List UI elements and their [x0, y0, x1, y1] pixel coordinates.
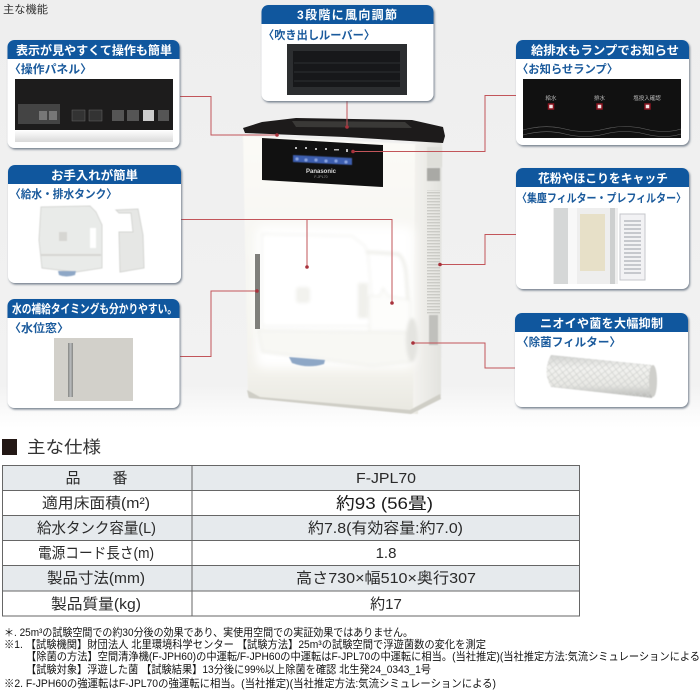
- panel: tanks: [8, 165, 181, 283]
- heading: ニオイや菌を大幅抑制: [540, 316, 663, 330]
- photo: louver: [287, 44, 407, 95]
- row: floor area: 適用床面積(m²): [42, 495, 150, 512]
- row: cord length: [38, 545, 396, 562]
- inner glow: [256, 226, 414, 368]
- footnotes: [4, 625, 700, 690]
- row: weight: 製品質量(kg): [51, 595, 141, 613]
- brand: Panasonic: [306, 169, 337, 175]
- heading: main specifications: 主な仕様: [27, 438, 101, 457]
- row: dimensions: 高さ730×幅510×奥行307: [296, 570, 476, 587]
- heading: 給排水もランプでお知らせ: [531, 42, 679, 58]
- row: floor area: [42, 494, 433, 513]
- specification table: [2, 465, 580, 616]
- row: weight: [51, 595, 402, 613]
- connector lines: [180, 96, 516, 368]
- heading: 花粉やほこりをキャッチ: [538, 170, 668, 186]
- photo: lamps: 塩投入確認: [633, 94, 661, 102]
- panel: operation panel: [8, 40, 180, 148]
- row: floor area: 約93 (56畳): [336, 494, 433, 513]
- heading: 水の補給タイミングも分かりやすい。: [12, 301, 177, 316]
- row: dimensions: 製品寸法(mm): [47, 570, 145, 587]
- product: air purifier humidifier: F-JPL70: [314, 175, 328, 179]
- heading: 表示が見やすくて操作も簡単: [16, 42, 172, 58]
- panel: water level window: [8, 299, 180, 408]
- photo: lamps: 排水: [594, 94, 605, 102]
- row: cord length: 電源コード長さ(m): [38, 545, 154, 562]
- photo: tanks: [39, 206, 144, 276]
- panel: notification lamps: [516, 40, 689, 145]
- subheading: 〈吹き出しルーバー〉: [263, 28, 375, 42]
- row: dimensions: [47, 570, 476, 587]
- photo: window: [54, 338, 133, 401]
- panel lights: [295, 147, 348, 152]
- footnotes: ＊. 25m³の試験空間での約30分後の効果であり、実使用空間での実証効果ではありません。: [4, 625, 413, 639]
- tank cap: [289, 357, 325, 366]
- row: model number: 番: [112, 470, 128, 487]
- row: model number: F-JPL70: [356, 470, 416, 487]
- subheading: 〈除菌フィルター〉: [517, 335, 621, 349]
- photo: control panel: [15, 79, 173, 142]
- photo: lamps: [523, 79, 681, 138]
- subheading: 〈水位窓〉: [9, 321, 69, 335]
- footnotes: 【試験対象】浮遊した菌 【試験結果】13分後に99%以上除菌を確認 北生発24_0343_1号: [26, 662, 431, 676]
- base: [247, 390, 441, 414]
- background: [0, 0, 700, 428]
- heading: main features: 主な機能: [3, 2, 48, 16]
- top lid: [243, 118, 445, 143]
- subheading: 〈操作パネル〉: [9, 62, 92, 76]
- heading: お手入れが簡単: [51, 168, 138, 182]
- row: tank capacity: 約7.8(有効容量:約7.0): [308, 520, 463, 537]
- row: tank capacity: [37, 520, 463, 537]
- side vents: [427, 190, 440, 315]
- water level window: [255, 254, 260, 329]
- water tank: [258, 234, 418, 366]
- photo: lamps: 給水: [545, 94, 557, 102]
- panel: antibacterial filter: [515, 313, 688, 407]
- heading: main specifications: [2, 438, 101, 457]
- connector dots: [255, 125, 442, 345]
- product: air purifier humidifier: [243, 118, 445, 414]
- photo: cylinder filter: [546, 355, 657, 398]
- subheading: 〈お知らせランプ〉: [517, 62, 618, 76]
- subheading: 〈給水・排水タンク〉: [10, 187, 117, 201]
- row: model number: [65, 470, 416, 487]
- row: tank capacity: 給水タンク容量(L): [37, 520, 156, 537]
- blue indicators: [293, 155, 352, 165]
- panel: dust filter: [516, 168, 689, 289]
- side label: [427, 147, 442, 345]
- row: weight: 約17: [370, 596, 402, 613]
- footnotes: ※1. 【試験機関】財団法人 北里環境科学センター 【試験方法】25m³の試験空間で浮遊菌数の変化を測定: [4, 637, 486, 651]
- heading: 3段階に風向調節: [297, 7, 397, 22]
- row: model number: 品: [65, 470, 81, 487]
- footnotes: ※2. F-JPH60の強運転はF-JPL70の強運転に相当。(当社推定)(当社推定方法:気流シミュレーションによる): [4, 676, 496, 690]
- row: cord length: 1.8: [376, 545, 396, 562]
- photo: filters: [553, 208, 645, 284]
- panel: louver: [262, 5, 434, 101]
- black control panel: [262, 138, 383, 187]
